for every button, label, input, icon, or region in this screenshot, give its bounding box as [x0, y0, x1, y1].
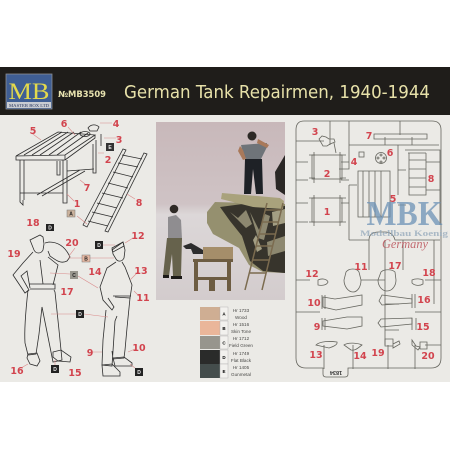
numbered part labels: figures and bench: 10 — [132, 343, 146, 354]
paint reference letter boxes: E — [108, 145, 112, 151]
numbered part labels: figures and bench: 8 — [136, 198, 143, 209]
paint B — [200, 321, 251, 335]
numbered part labels: figures and bench: 3 — [116, 135, 122, 146]
figure callout leader lines — [21, 123, 140, 368]
sprue code tag: 1834 — [329, 369, 342, 375]
paint E: Gunmetal — [231, 372, 251, 377]
numbered part labels: sprue: 17 — [388, 261, 402, 272]
figure: soldier in side cap — [100, 242, 132, 376]
paint E: Hr 1405 — [233, 365, 250, 370]
paint C: Field Green — [229, 343, 253, 348]
numbered part labels: sprue: 20 — [421, 351, 435, 362]
paint C: Hr 1712 — [233, 336, 250, 341]
numbered part labels: sprue: 13 — [309, 350, 323, 361]
paint B: Hr 1516 — [233, 322, 250, 327]
numbered part labels: sprue: 14 — [353, 351, 367, 362]
numbered part labels: sprue: 10 — [307, 298, 321, 309]
part 8: ladder — [408, 153, 426, 195]
paint C — [200, 336, 253, 349]
logo: Master Box — [6, 74, 52, 109]
paint D: Hr 1749 — [233, 351, 250, 356]
paint reference letter boxes — [46, 143, 143, 376]
standing figure on tank — [238, 132, 269, 194]
numbered part labels: sprue: 11 — [354, 262, 368, 273]
paint C: C — [222, 340, 226, 346]
watermark: MBK Germany: Modellbau Koenig — [360, 228, 449, 238]
paint D: Flat Black — [231, 358, 252, 363]
paint B: Skin Tone — [231, 329, 251, 334]
header band — [0, 67, 450, 115]
paint A: Hr 1733 — [233, 308, 250, 313]
parts 3, 4, 6: vise parts — [319, 136, 386, 164]
numbered part labels: figures and bench: 18 — [26, 218, 40, 229]
numbered part labels: figures and bench: 14 — [88, 267, 102, 278]
numbered part labels: figures and bench: 15 — [68, 368, 82, 379]
paint reference letter boxes: D — [53, 367, 57, 373]
icon: bench vise — [80, 125, 101, 146]
numbered part labels: sprue: 3 — [312, 127, 318, 138]
numbered part labels: sprue: 16 — [417, 295, 431, 306]
numbered part labels: figures and bench: 19 — [7, 249, 21, 260]
numbered part labels: figures and bench: 4 — [113, 119, 120, 130]
numbered part labels: figures and bench: 11 — [136, 293, 150, 304]
logo: Master Box: MASTER BOX LTD — [9, 103, 49, 108]
product number: №MB3509 — [58, 90, 106, 100]
paint reference letter boxes: A — [69, 212, 73, 218]
numbered part labels: figures and bench: 5 — [30, 126, 36, 137]
panel: ladder drawing — [83, 149, 147, 232]
numbered part labels: sprue: 7 — [366, 131, 372, 142]
numbered part labels: sprue: 18 — [422, 268, 436, 279]
numbered part labels: figures and bench: 13 — [134, 266, 148, 277]
logo: Master Box: MB — [8, 79, 50, 104]
paint A — [200, 307, 250, 320]
sprue runners — [296, 121, 441, 369]
part 5: bench top — [358, 171, 390, 217]
paint reference letter boxes: D — [97, 243, 101, 249]
panel: sprue diagram — [296, 121, 441, 377]
numbered part labels: sprue: 15 — [416, 322, 430, 333]
paint B: B — [222, 326, 226, 331]
numbered part labels: figures and bench: 2 — [105, 155, 111, 166]
numbered part labels: figures and bench: 1 — [74, 199, 80, 210]
workbench in photo — [183, 243, 233, 291]
paint reference letter boxes: D — [48, 226, 52, 232]
watermark: MBK Germany: Germany — [382, 237, 428, 251]
numbered part labels: sprue: 19 — [371, 348, 385, 359]
paint A: Wood — [235, 315, 247, 320]
numbered part labels: figures and bench: 7 — [84, 183, 90, 194]
paint reference letter boxes: B — [84, 256, 88, 262]
numbered part labels: sprue: 12 — [305, 269, 319, 280]
ladder in photo — [245, 203, 283, 290]
parts 1 and 2: bench frames — [309, 152, 346, 226]
watermark: MBK Germany: MBK — [366, 194, 442, 233]
panel: model photograph — [156, 122, 285, 300]
part 7: bench rail — [374, 134, 427, 139]
numbered part labels: sprue: 4 — [351, 157, 358, 168]
numbered part labels: sprue: 1 — [324, 207, 330, 218]
parts 9, 10, 15, 16: legs — [323, 295, 412, 329]
numbered part labels: figures and bench: 17 — [60, 287, 74, 298]
panel: workbench drawing — [16, 125, 101, 205]
paint A: A — [222, 312, 226, 316]
parts 12 and 18: heads — [318, 279, 423, 285]
parts 11 and 17: torsos — [344, 269, 396, 292]
paint E — [200, 364, 251, 378]
paint D: D — [222, 355, 226, 360]
paint colour chart — [200, 307, 253, 378]
paint E: E — [222, 369, 226, 374]
watermark: MBK Germany — [360, 194, 449, 251]
numbered part labels: sprue: 2 — [324, 169, 330, 180]
numbered part labels: sprue: 9 — [314, 322, 320, 333]
numbered part labels: sprue: 5 — [390, 194, 396, 205]
numbered part labels: figures and bench: 6 — [61, 119, 68, 130]
numbered part labels: figures and bench: 16 — [10, 366, 24, 377]
parts 19 and 20: arms — [385, 339, 427, 350]
paint reference letter boxes: C — [72, 273, 76, 279]
paint reference letter boxes: D — [137, 370, 141, 376]
tank hull — [207, 155, 285, 273]
numbered part labels: sprue: 6 — [387, 148, 394, 159]
paint reference letter boxes: D — [78, 312, 82, 318]
numbered part labels: figures and bench — [7, 119, 150, 379]
instruction sheet background — [0, 115, 450, 382]
figure: soldier shading his eyes — [13, 235, 71, 366]
numbered part labels: figures and bench: 12 — [131, 231, 145, 242]
paint D — [200, 350, 252, 364]
parts 13 and 14: boots — [316, 341, 362, 350]
numbered part labels: figures and bench: 20 — [65, 238, 79, 249]
numbered part labels: sprue — [305, 127, 436, 362]
sprue frame — [296, 121, 441, 377]
numbered part labels: sprue: 8 — [428, 174, 435, 185]
standing figure on floor — [163, 205, 182, 279]
title: German Tank Repairmen, 1940-1944 — [124, 83, 430, 103]
numbered part labels: figures and bench: 9 — [87, 348, 93, 359]
